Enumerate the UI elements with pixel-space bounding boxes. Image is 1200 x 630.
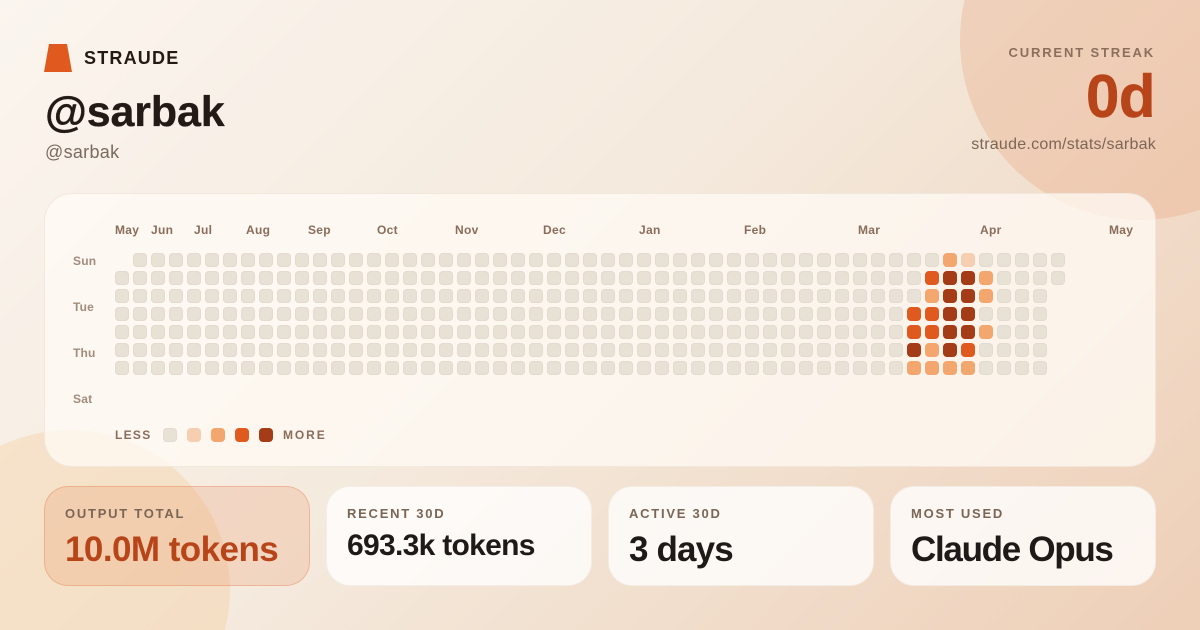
stat card: recent 30d: 693.3k tokens (347, 529, 535, 562)
month labels: May (1109, 223, 1133, 237)
month labels (115, 223, 1133, 237)
background circle: bottom left (0, 432, 230, 630)
stat card: output total: OUTPUT TOTAL (65, 506, 185, 521)
heatmap grid (115, 253, 1065, 375)
stat card: output total (44, 486, 310, 586)
month labels: Dec (543, 223, 566, 237)
streak value: 0d (1086, 63, 1155, 130)
stat card: most used: MOST USED (911, 506, 1004, 521)
stat card: recent 30d: RECENT 30D (347, 506, 445, 521)
legend: MORE (283, 428, 327, 442)
month labels: Feb (744, 223, 766, 237)
stat card: output total: 10.0M tokens (65, 530, 278, 569)
streak label: CURRENT STREAK (1008, 45, 1155, 60)
legend (115, 428, 327, 442)
month labels: Sep (308, 223, 331, 237)
stat card: active 30d: 3 days (629, 530, 733, 569)
display name heading: @sarbak (45, 88, 225, 136)
panel: activity heatmap background (44, 193, 1156, 467)
month labels: Jun (151, 223, 173, 237)
handle: @sarbak (45, 142, 119, 162)
brand name: STRAUDE (84, 48, 179, 68)
month labels: Oct (377, 223, 398, 237)
weekday labels: Tue (73, 300, 94, 314)
stat card: active 30d (608, 486, 874, 586)
stat card: recent 30d (326, 486, 592, 586)
month labels: Nov (455, 223, 479, 237)
weekday labels: Sat (73, 392, 92, 406)
legend: LESS (115, 428, 152, 442)
month labels: Aug (246, 223, 270, 237)
month labels: May (115, 223, 139, 237)
weekday labels: Thu (73, 346, 96, 360)
month labels: Jan (639, 223, 661, 237)
weekday labels (73, 254, 96, 406)
stat card: most used: Claude Opus (911, 530, 1113, 569)
month labels: Apr (980, 223, 1002, 237)
profile link: straude.com/stats/sarbak (971, 136, 1156, 153)
logo mark: orange trapezoid (44, 44, 72, 72)
background circle: top right (960, 0, 1200, 219)
weekday labels: Sun (73, 254, 96, 268)
stat card: most used (890, 486, 1156, 586)
month labels: Mar (858, 223, 880, 237)
stat card: active 30d: ACTIVE 30D (629, 506, 722, 521)
month labels: Jul (194, 223, 212, 237)
